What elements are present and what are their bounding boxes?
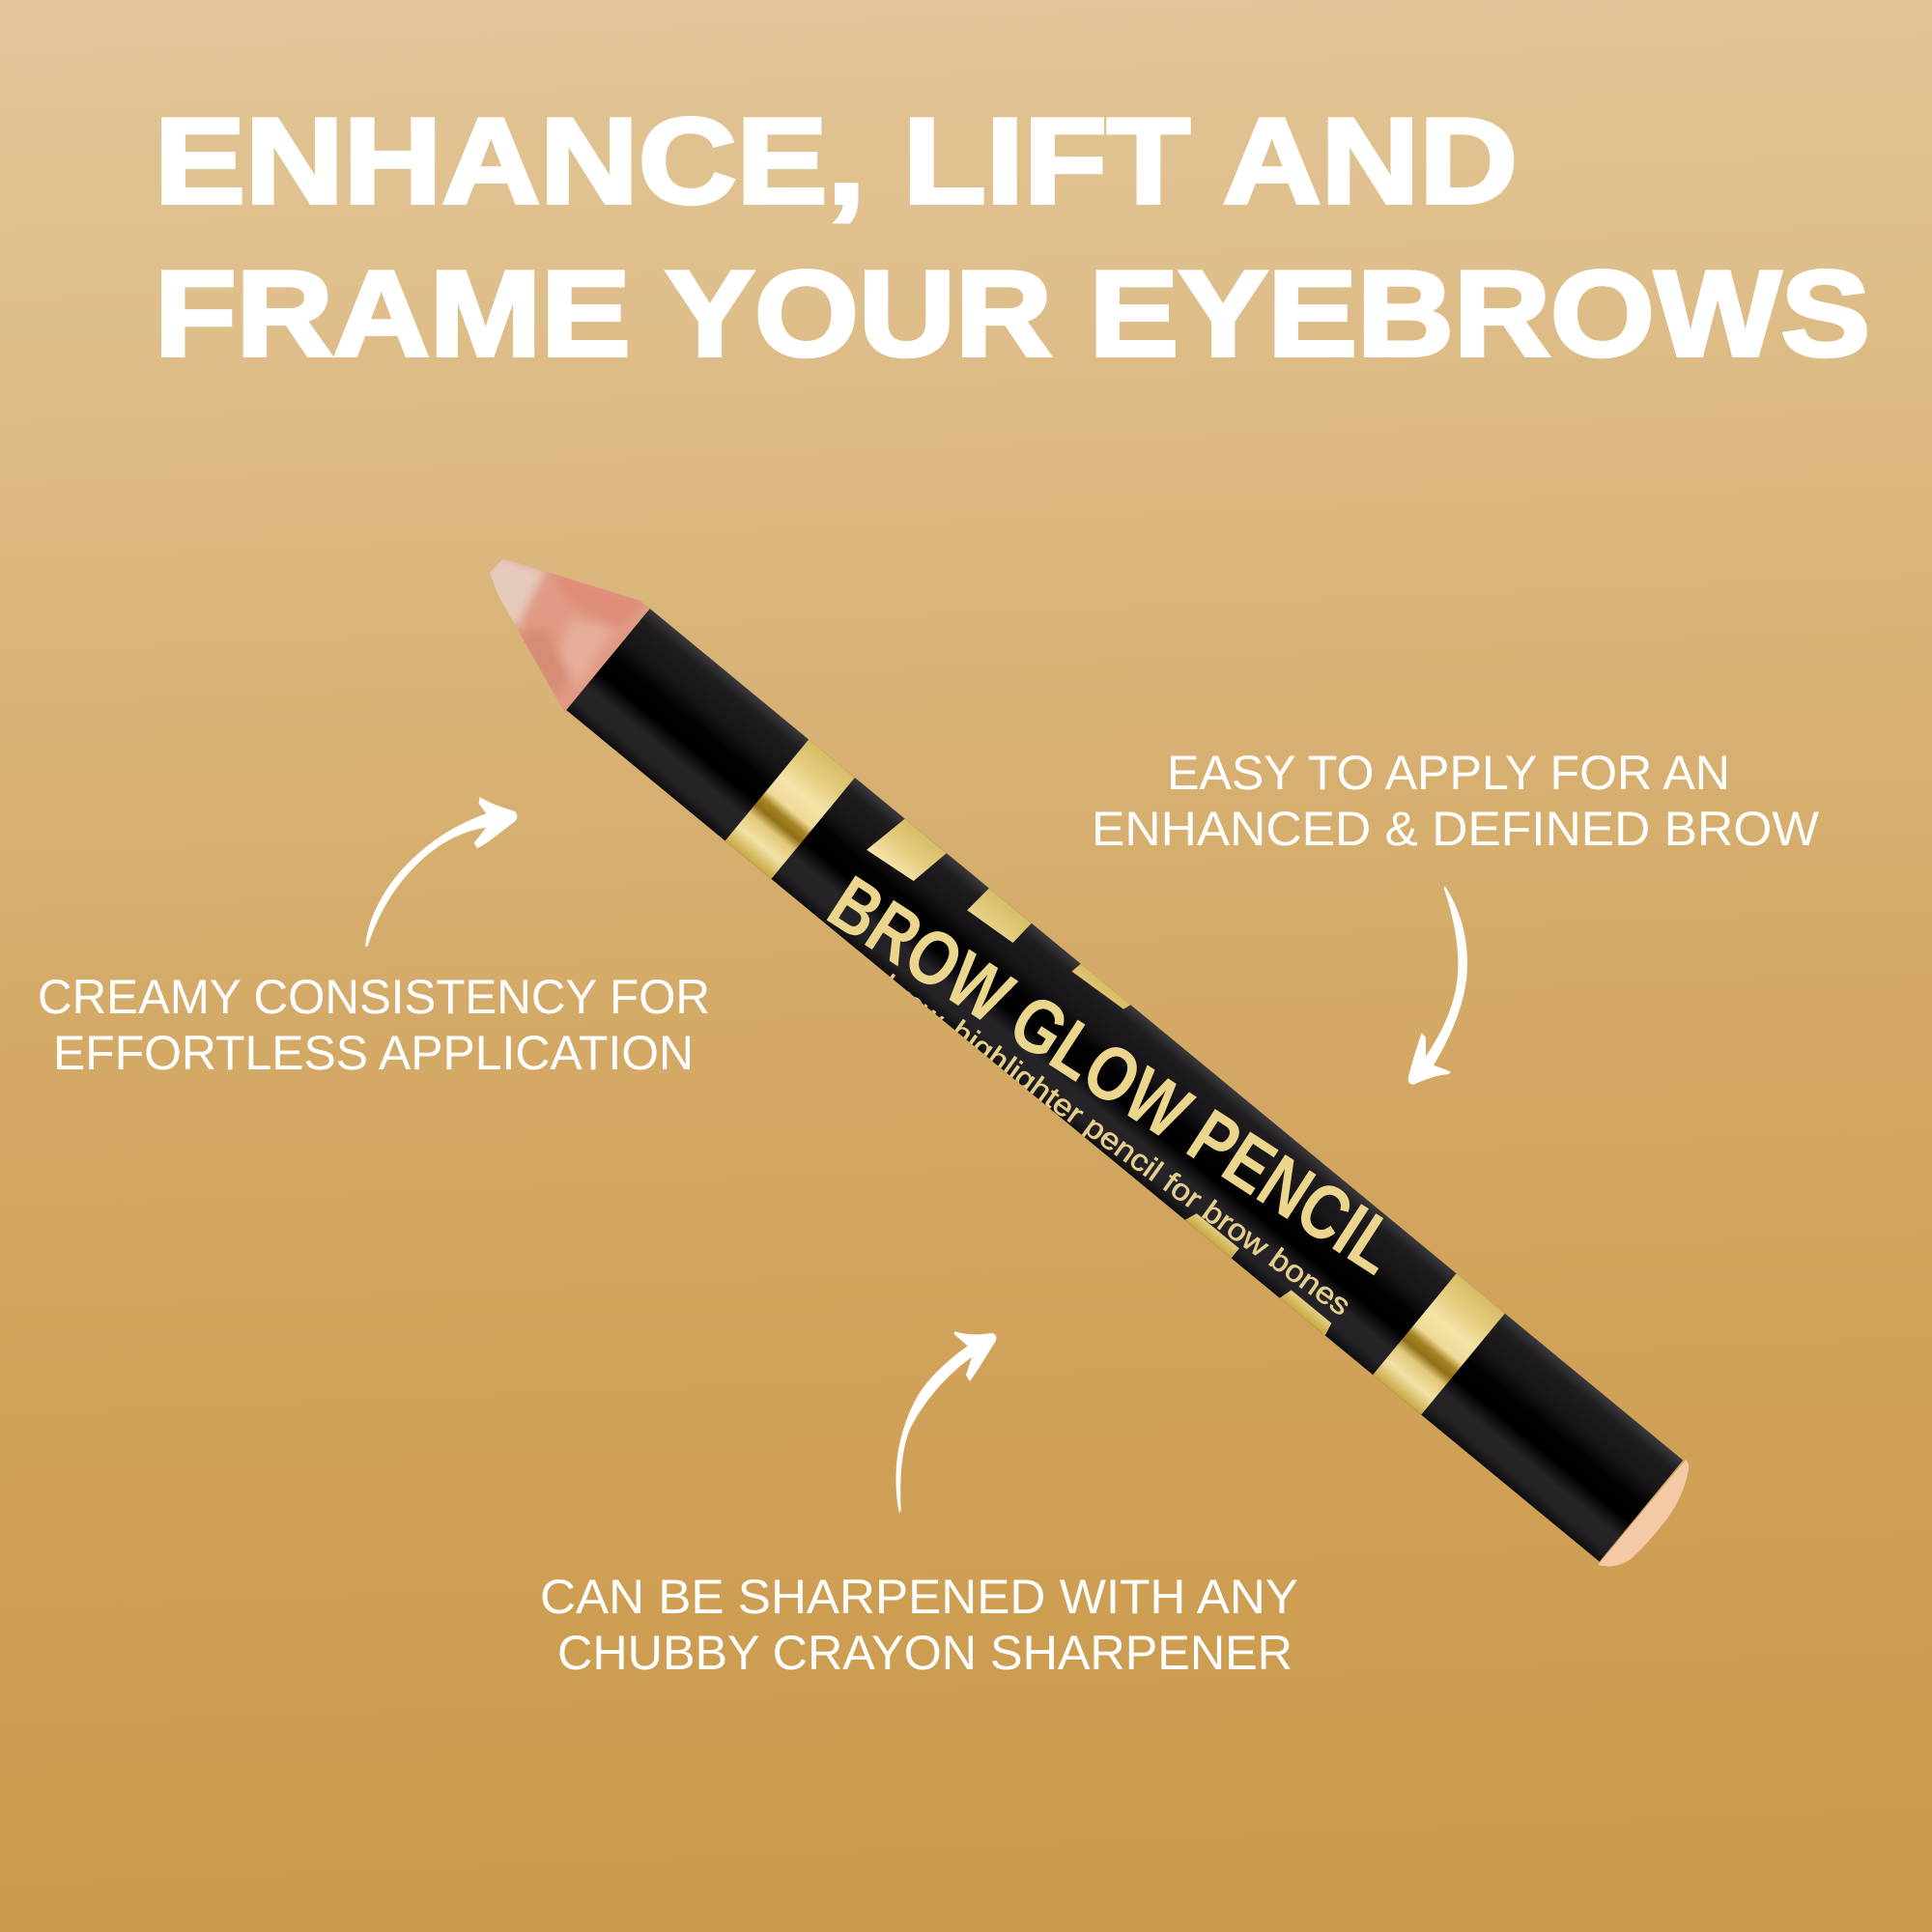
- callout: creamy consistency: EFFORTLESS APPLICATION: [53, 1026, 694, 1080]
- callout: sharpener: CHUBBY CRAYON SHARPENER: [557, 1626, 1293, 1680]
- gold band near tip: [725, 740, 855, 879]
- callout: easy to apply: [1092, 746, 1820, 856]
- arrow: creamy consistency to tip: [365, 797, 517, 947]
- pencil descriptor: eyebrow: [833, 938, 951, 1037]
- callout: creamy consistency: [38, 970, 710, 1080]
- callout: easy to apply: ENHANCED & DEFINED BROW: [1092, 802, 1820, 856]
- pencil product: [483, 551, 1689, 1567]
- gold band near end: [1373, 1273, 1505, 1415]
- callout: creamy consistency: CREAMY CONSISTENCY FOR: [38, 970, 710, 1024]
- title: ENHANCE, LIFT AND: [155, 93, 1518, 229]
- gold pattern blocks: [813, 812, 1408, 1335]
- pencil end cap: [1598, 1460, 1689, 1567]
- pencil descriptor: [833, 938, 1357, 1322]
- title: [155, 93, 1870, 382]
- callout: sharpener: [540, 1570, 1298, 1680]
- pencil tip: [490, 558, 649, 713]
- pencil descriptor: highlighter pencil for brow bones: [945, 1013, 1357, 1322]
- pencil name: BROW GLOW PENCIL: [814, 860, 1413, 1291]
- callout: easy to apply: EASY TO APPLY FOR AN: [1167, 746, 1730, 800]
- callout: sharpener: CAN BE SHARPENED WITH ANY: [540, 1570, 1298, 1624]
- arrow: sharpener to pencil: [895, 1331, 996, 1513]
- arrow: easy to apply to pencil: [1408, 886, 1467, 1085]
- pencil barrel: [566, 609, 1683, 1562]
- title: FRAME YOUR EYEBROWS: [155, 245, 1870, 382]
